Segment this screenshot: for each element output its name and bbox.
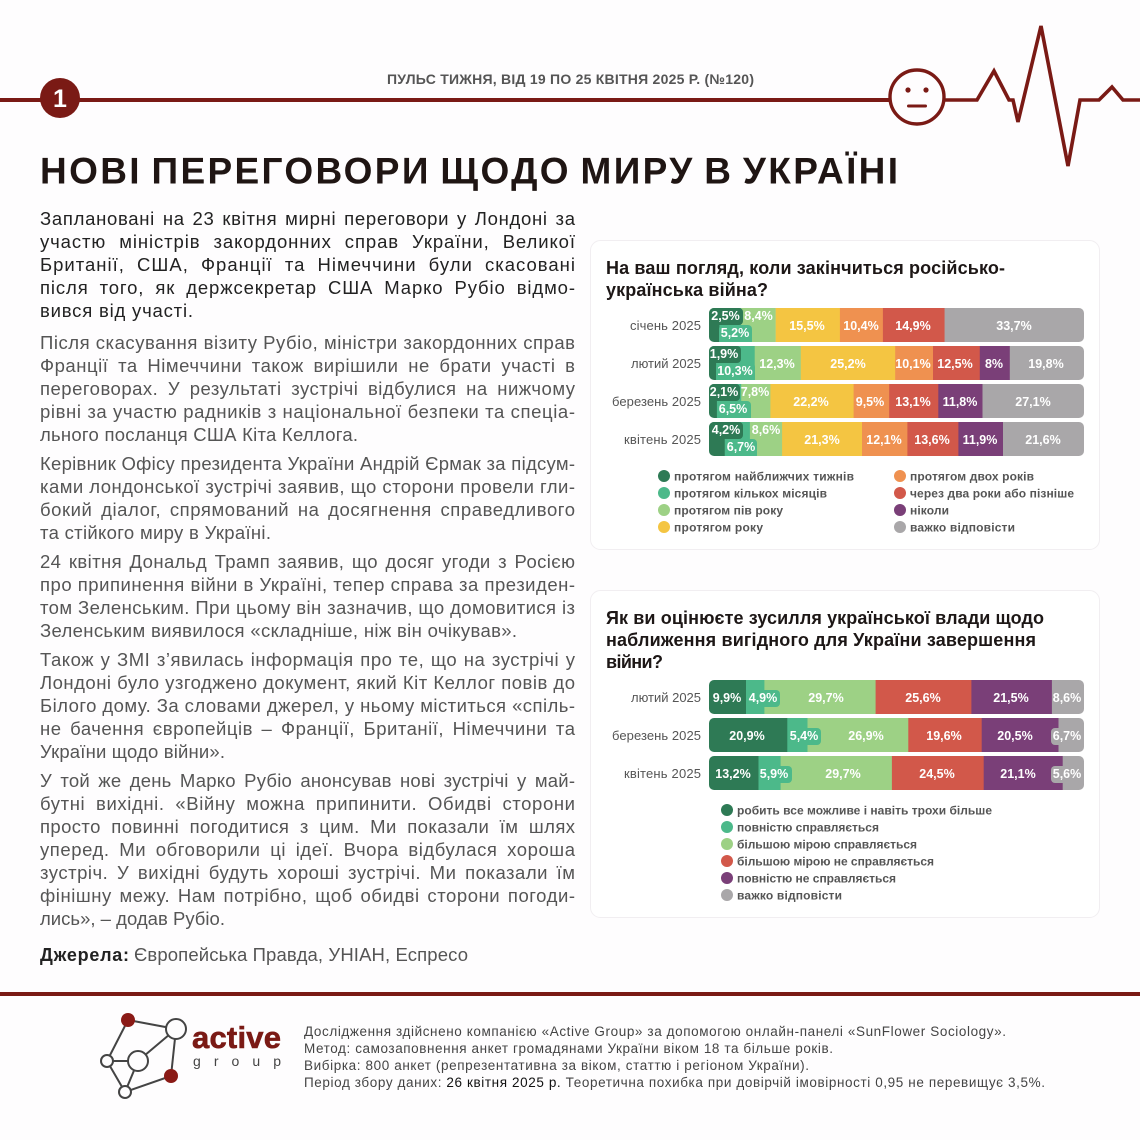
text block: paragraph 4 <box>40 551 575 641</box>
legend: повністю не справляється <box>737 872 896 886</box>
bar value labels: 13,1% <box>895 395 931 409</box>
bar value labels: 6,7% <box>1053 729 1081 743</box>
bar value labels: 5,6% <box>1053 767 1081 781</box>
text block: lead paragraph: вився від участі. <box>40 300 193 321</box>
footer methodology text: Період збору даних: 26 квітня 2025 р. Теоретична похибка при довірчій імовірності 0,95 не перевищує 3,5%. <box>304 1075 1045 1090</box>
row labels: січень 2025 <box>630 318 701 333</box>
bar value labels: 21,5% <box>993 691 1029 705</box>
text block: lead paragraph: після того, як держсекретар США Марко Рубіо відмо- <box>40 277 575 298</box>
bar value labels <box>710 309 1064 454</box>
bar value labels: 13,6% <box>914 433 950 447</box>
bar value labels: 4,2% <box>712 423 740 437</box>
bar value labels: 21,6% <box>1025 433 1061 447</box>
header rule with pulse line <box>0 26 1140 166</box>
footer methodology text: Дослідження здійснено компанією «Active Group» за допомогою онлайн-панелі «SunFlower Sociology». <box>304 1024 1006 1039</box>
bar value labels: 8% <box>985 357 1003 371</box>
panel: government efforts assessment <box>590 590 1100 918</box>
legend: протягом року <box>674 520 763 534</box>
bar value labels: 27,1% <box>1015 395 1051 409</box>
bar value labels: 11,8% <box>943 395 977 409</box>
title: НОВІ ПЕРЕГОВОРИ ЩОДО МИРУ В УКРАЇНІ <box>40 150 898 192</box>
legend: більшою мірою не справляється <box>737 854 934 868</box>
logo: active group: group <box>193 1053 281 1069</box>
text block: paragraph 5 <box>40 649 576 762</box>
badge: issue number: 1 <box>53 85 67 113</box>
bar value labels: 19,6% <box>926 729 962 743</box>
row labels: квітень 2025 <box>624 766 701 781</box>
legend: протягом кількох місяців <box>674 486 827 500</box>
bar value labels: 29,7% <box>825 767 861 781</box>
text block: paragraph 6 <box>40 770 576 929</box>
bar value labels: 33,7% <box>996 319 1032 333</box>
bar value labels: 15,5% <box>789 319 825 333</box>
bar value labels: 29,7% <box>808 691 844 705</box>
bar value labels: 1,9% <box>710 347 738 361</box>
chart heading: українська війна? <box>606 280 768 300</box>
card background <box>590 590 1100 918</box>
panel: war end forecast <box>590 240 1100 550</box>
sources: Джерела: <box>40 945 129 965</box>
text block: paragraph 3: бокий діалог, спрямований на досягнення справедливого <box>40 499 575 520</box>
text block: paragraph 4: том Зеленським. При цьому він зазначив, що домовитися із <box>40 597 575 618</box>
bar value labels: 14,9% <box>895 319 931 333</box>
row labels: березень 2025 <box>612 728 701 743</box>
text block: paragraph 3 <box>40 453 575 543</box>
bar value labels: 11,9% <box>963 433 997 447</box>
sources: Європейська Правда, УНІАН, Еспресо <box>134 944 468 965</box>
bar value labels: 6,7% <box>727 440 755 454</box>
bar value labels: 8,6% <box>752 423 780 437</box>
row labels <box>612 318 701 447</box>
chart heading: На ваш погляд, коли закінчиться російсько- <box>606 258 1005 278</box>
bar value labels: 2,1% <box>710 385 738 399</box>
text block: paragraph 6: бутні вихідні. «Війну можна припинити. Обидві сторони <box>40 793 575 814</box>
text block: paragraph 5: Також у ЗМІ з’явилась інформація про те, що на зустрічі у <box>40 649 576 670</box>
text block: paragraph 6: уперед. Ми обговорили ці ідеї. Вчора відбулася хороша <box>40 839 576 860</box>
bar value labels: 25,2% <box>830 357 866 371</box>
text block: paragraph 2 <box>40 332 576 445</box>
chart heading: Як ви оцінюєте зусилля української влади щодо <box>606 608 1044 628</box>
text block: paragraph 3: ками лондонської зустрічі заявив, що сторони провели гли- <box>40 476 575 497</box>
chart heading: війни? <box>606 652 663 672</box>
icon: neutral face <box>890 70 944 124</box>
bar value labels <box>713 691 1081 781</box>
text block: lead paragraph: Британії, США, Франції та Німеччини були скасовані <box>40 254 575 275</box>
bar value labels: 12,1% <box>866 433 902 447</box>
bar value labels: 8,6% <box>1053 691 1081 705</box>
text block: paragraph 5: не бачення європейців – Франції, Британії, Німеччини та <box>40 718 576 739</box>
text block: paragraph 5: Лондоні було узгоджено документ, який Кіт Келлог повів до <box>40 672 575 693</box>
legend: робить все можливе і навіть трохи більше <box>737 804 992 818</box>
row labels: лютий 2025 <box>631 356 701 371</box>
text block: paragraph 6: лись», – додав Рубіо. <box>40 908 225 929</box>
bar value labels: 9,5% <box>856 395 884 409</box>
bar value labels: 5,2% <box>721 326 749 340</box>
text block: paragraph 4: про припинення війни в Україні, тепер справа за президен- <box>40 574 575 595</box>
legend: протягом двох років <box>910 470 1034 484</box>
legend: повністю справляється <box>737 820 879 834</box>
text block: paragraph 2: рівні за участю радників з національної безпеки та спеціа- <box>40 401 575 422</box>
text block: paragraph 2: Після скасування візиту Рубіо, міністри закордонних справ <box>40 332 575 353</box>
text block: paragraph 6: просто повинні погодитися з цим. Ми показали їм шлях <box>40 816 576 837</box>
text block: paragraph 6: У той же день Марко Рубіо анонсував нові зустрічі у май- <box>40 770 575 791</box>
chart heading <box>606 258 1005 300</box>
stacked bar chart <box>709 680 1087 790</box>
bar value labels: 2,5% <box>711 309 740 323</box>
text block: paragraph 3: Керівник Офісу президента України Андрій Єрмак за підсум- <box>40 453 575 474</box>
text block: paragraph 2: Франції та Німеччини також вирішили не брати участі в <box>40 355 575 376</box>
legend: важко відповісти <box>910 520 1015 534</box>
legend: більшою мірою справляється <box>737 838 917 852</box>
legend: важко відповісти <box>737 888 842 902</box>
row labels: березень 2025 <box>612 394 701 409</box>
text block: paragraph 4: Зеленським виявилося «складніше, ніж він очікував». <box>40 620 517 641</box>
text block: lead paragraph <box>40 208 576 321</box>
chart heading <box>606 608 1044 672</box>
bar value labels: 26,9% <box>848 729 884 743</box>
legend: через два роки або пізніше <box>910 486 1074 500</box>
legend: протягом пів року <box>674 504 783 518</box>
logo: active group: active <box>192 1020 281 1055</box>
bar value labels: 19,8% <box>1028 357 1064 371</box>
row labels: лютий 2025 <box>631 690 701 705</box>
legend <box>721 804 992 902</box>
bar value labels: 6,5% <box>719 402 747 416</box>
badge: issue number <box>40 78 80 118</box>
bar value labels: 9,9% <box>713 691 741 705</box>
bar value labels: 12,3% <box>759 357 795 371</box>
row labels: квітень 2025 <box>624 432 701 447</box>
text block: paragraph 6: зустріч. У вихідні будуть хороші зустрічі. Ми показали їм <box>40 862 575 883</box>
stacked bar chart <box>703 308 1085 459</box>
bar value labels: 25,6% <box>905 691 941 705</box>
bar value labels: 4,9% <box>749 691 777 705</box>
footer methodology text <box>304 1024 1045 1090</box>
header label: ПУЛЬС ТИЖНЯ, ВІД 19 ПО 25 КВІТНЯ 2025 Р. (№120) <box>387 71 754 87</box>
footer methodology text: Вибірка: 800 анкет (репрезентативна за віком, статтю і регіоном України). <box>304 1058 809 1073</box>
text block: paragraph 5: Білого дому. За словами джерел, у ньому міститься «спіль- <box>40 695 575 716</box>
bar value labels: 21,3% <box>804 433 840 447</box>
bar value labels: 7,8% <box>741 385 769 399</box>
bar value labels: 10,4% <box>843 319 879 333</box>
text block: lead paragraph: Заплановані на 23 квітня мирні переговори у Лондоні за <box>40 208 576 229</box>
legend <box>658 470 1074 534</box>
bar value labels: 22,2% <box>793 395 829 409</box>
bar value labels: 20,9% <box>729 729 765 743</box>
legend: протягом найближчих тижнів <box>674 470 854 484</box>
bar value labels: 5,9% <box>760 767 788 781</box>
text block: paragraph 5: України щодо війни». <box>40 741 225 762</box>
row labels <box>612 690 701 781</box>
bar value labels: 24,5% <box>919 767 955 781</box>
card background <box>590 240 1100 550</box>
text block: paragraph 3: та стійкого миру в Україні. <box>40 522 271 543</box>
footer methodology text: Метод: самозаповнення анкет громадянами України віком 18 та більше років. <box>304 1041 833 1056</box>
bar value labels: 10,3% <box>717 364 753 378</box>
bar value labels: 10,1% <box>895 357 931 371</box>
logo: active group <box>101 1013 281 1098</box>
bar value labels: 8,4% <box>744 309 773 323</box>
legend: ніколи <box>910 504 949 518</box>
text block: paragraph 4: 24 квітня Дональд Трамп заявив, що досяг угоди з Росією <box>40 551 575 572</box>
bar value labels: 12,5% <box>937 357 973 371</box>
chart heading: наближення вигідного для України завершення <box>606 630 1036 650</box>
text block: paragraph 6: фінішну межу. Нам потрібно, щоб обидві сторони погоди- <box>40 885 575 906</box>
bar value labels: 5,4% <box>790 729 818 743</box>
bar value labels: 20,5% <box>997 729 1033 743</box>
text block: paragraph 2: переговорах. У результаті зустрічі відбулися на нижчому <box>40 378 576 399</box>
text block: lead paragraph: участю міністрів закордонних справ України, Великої <box>40 231 575 252</box>
bar value labels: 13,2% <box>715 767 751 781</box>
bar value labels: 21,1% <box>1000 767 1036 781</box>
text block: paragraph 2: льного посланця США Кіта Келлога. <box>40 424 358 445</box>
